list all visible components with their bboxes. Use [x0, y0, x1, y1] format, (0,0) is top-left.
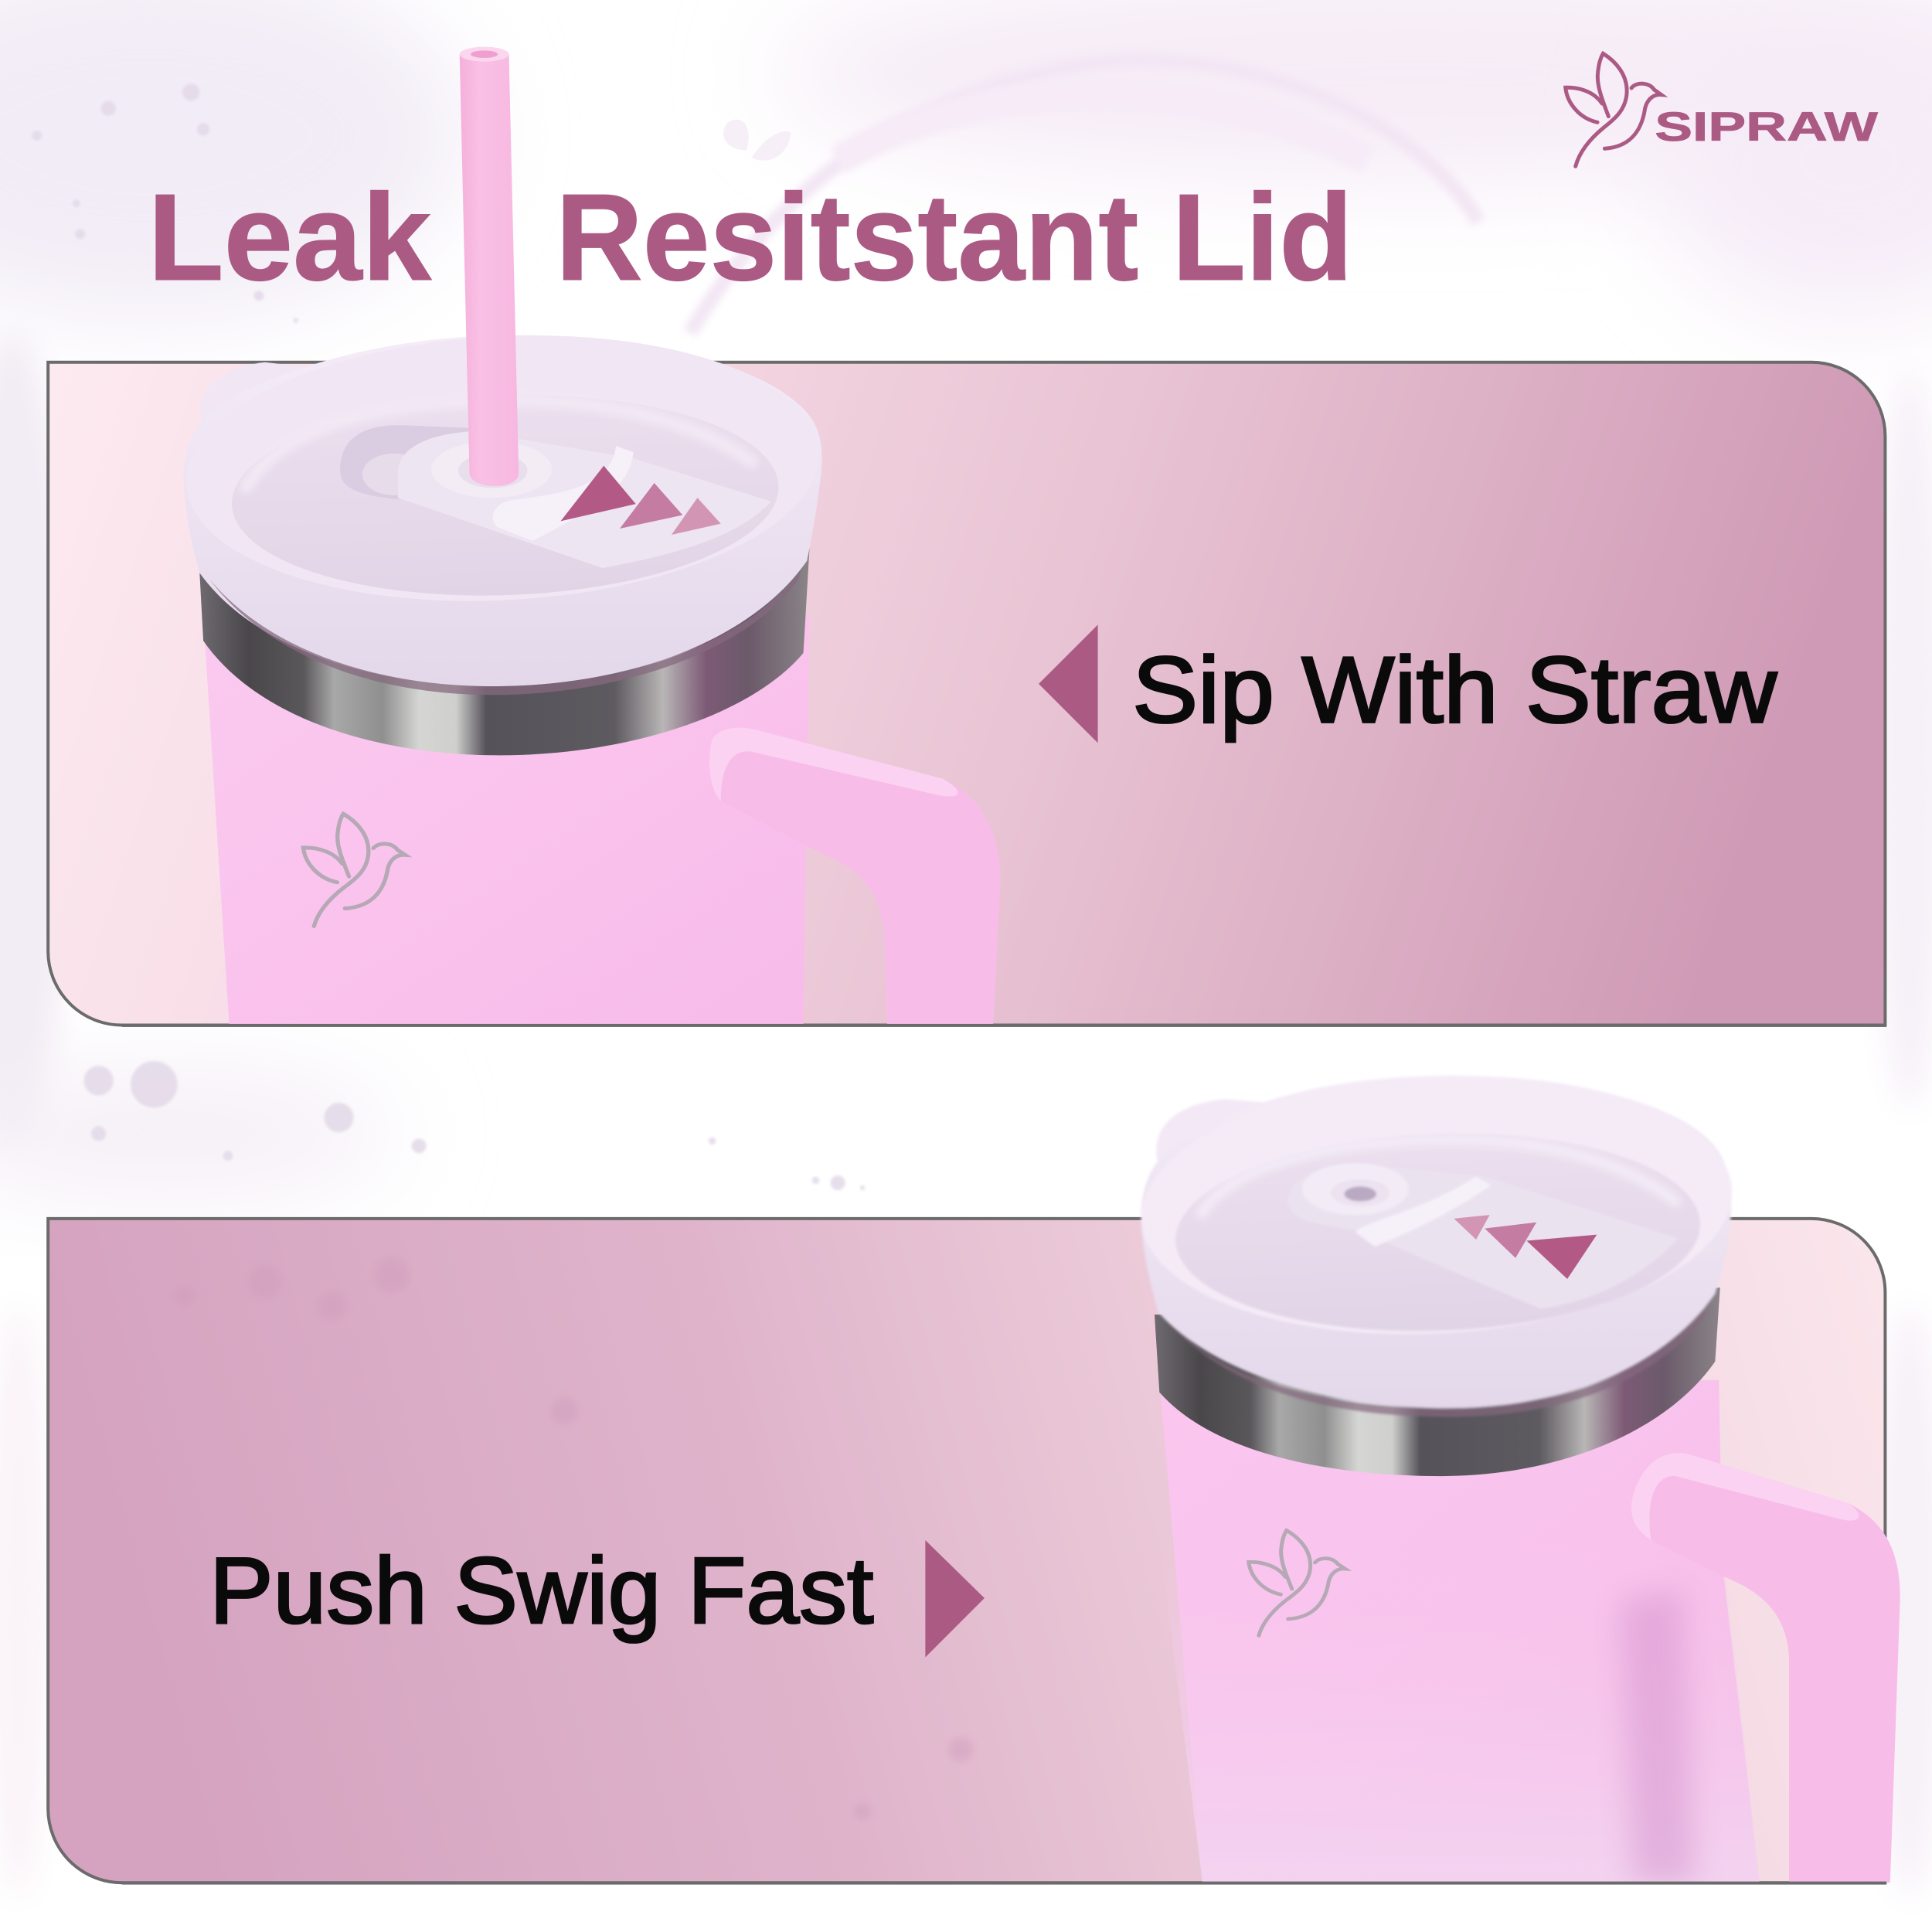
arrow: left: [1039, 624, 1098, 743]
icon: mug bird logo: [303, 814, 405, 926]
text: Sip With Straw: Sip With Straw: [1132, 637, 1777, 742]
panel bottom borders: [122, 1024, 1886, 1885]
mug 2 lid well: [1172, 1124, 1703, 1340]
panel: sip with straw background: [48, 362, 1885, 1026]
mug 2 lid rim: [1134, 1062, 1739, 1349]
title: Resitstant Lid: Resitstant Lid: [556, 168, 1353, 306]
logo: Sipraw: [1566, 53, 1878, 166]
mug 2 slider plate: [1287, 1165, 1679, 1308]
mug 2 lid tab: [1156, 1099, 1269, 1171]
mug 2 lid: [1134, 1062, 1739, 1417]
icon: mug 2 bird logo: [1249, 1530, 1345, 1635]
mug without straw: [1134, 1062, 1900, 1883]
mug 2 straw hole: [1302, 1163, 1408, 1215]
logo wordmark: SIPRAW: [1655, 104, 1878, 150]
mug with straw: [179, 47, 1001, 1026]
panel: push swig fast background: [48, 1219, 1885, 1883]
lid arrows: [560, 466, 721, 535]
title: Leak: Leak: [148, 168, 431, 306]
lid well: [232, 413, 779, 595]
lid recess: [340, 425, 468, 499]
arrow: right: [925, 1540, 985, 1657]
mug body: [203, 616, 810, 1026]
mug 2 lid arrows: [1454, 1215, 1597, 1279]
lid outer: [184, 335, 822, 686]
mug handle: [806, 765, 1000, 1024]
lid rim: [264, 335, 734, 601]
lid tab: [200, 362, 304, 422]
straw: [460, 47, 519, 486]
mug 2 lid outer: [1141, 1076, 1731, 1408]
mug 2 body: [1159, 1380, 1760, 1883]
icon: bird logo: [1566, 53, 1662, 166]
text: Push Swig Fast: Push Swig Fast: [209, 1538, 873, 1643]
steel band: [199, 549, 810, 755]
mug 2 handle: [1631, 1453, 1900, 1883]
mug 2 steel band: [1155, 1287, 1720, 1476]
slider plate: [398, 431, 771, 568]
straw hole: [431, 441, 552, 498]
